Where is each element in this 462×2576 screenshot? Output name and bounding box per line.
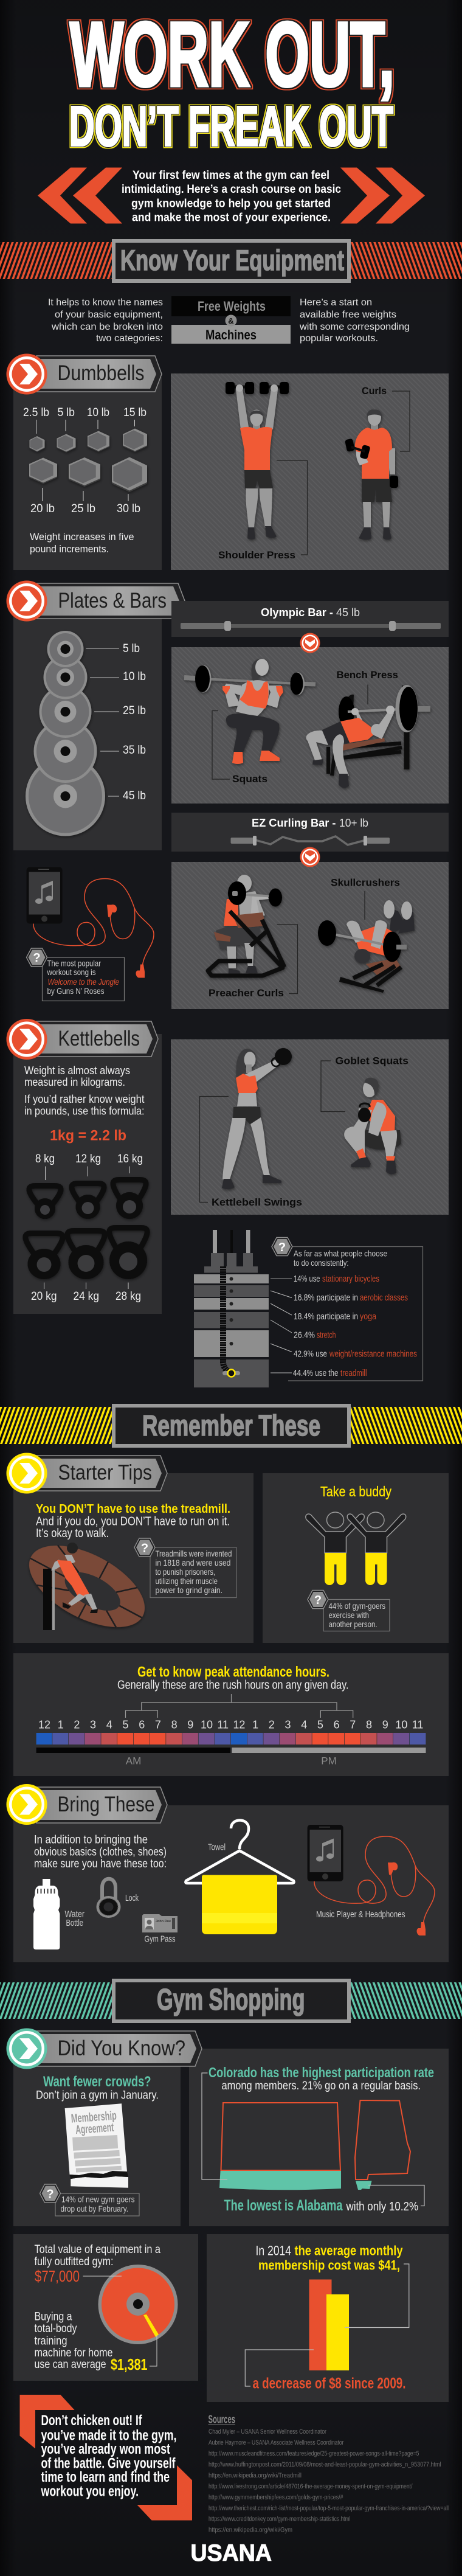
hour labels: 12 [38, 1719, 50, 1731]
panel: take a buddy [263, 1473, 449, 1643]
membership cost text: In 2014 [255, 2243, 291, 2258]
sources: Aubrie Haymore – USANA Associate Wellness Coordinator [209, 2439, 344, 2446]
callout: don't chicken out [19, 2395, 192, 2521]
hour labels: 7 [350, 1719, 356, 1731]
ribbon: Plates and Bars [6, 580, 185, 622]
plate labels: 5 lb [123, 642, 140, 655]
icon: chevron badge [300, 847, 320, 867]
formula: 1kg = 2.2 lb [50, 1128, 126, 1144]
hour labels: 4 [106, 1719, 112, 1731]
dumbbell weight labels: 25 lb [71, 502, 95, 515]
equipment intro right text: popular workouts. [300, 333, 378, 344]
sources: Chad Myler – USANA Senior Wellness Coordinator [209, 2428, 326, 2435]
sources: http://www.livestrong.com/article/487016-the-average-money-spent-on-gym-equipment/ [209, 2483, 413, 2490]
callout: workout song: The most popular [47, 959, 101, 968]
kettlebell labels [31, 1153, 143, 1303]
callout: gym-goers [308, 1590, 390, 1631]
stats list: aerobic classes [360, 1293, 408, 1303]
icon: torn membership agreement [65, 2103, 128, 2188]
hour labels [38, 1719, 423, 1731]
labels: barbell exercises: Bench Press [337, 669, 398, 681]
equipment value text: machine for home [34, 2347, 113, 2359]
equipment value text [34, 2243, 160, 2371]
kettlebell labels: 8 kg [35, 1153, 55, 1165]
hour labels: 1 [58, 1719, 64, 1731]
panel: fewer crowds [13, 2049, 181, 2226]
icon: torn membership agreement: Membership [71, 2109, 117, 2126]
callout: treadmill history: to punish prisoners, [156, 1567, 215, 1577]
callout: new gym goers: drop out by February. [61, 2204, 128, 2213]
panel: EZ bar exercises [171, 862, 449, 1009]
ribbon: Kettlebells [6, 1019, 158, 1060]
plate labels [86, 642, 146, 802]
stats list: weight/resistance machines [329, 1349, 417, 1359]
peak attendance heading [117, 1664, 349, 1692]
hour labels: 9 [382, 1719, 388, 1731]
panel: participation by state [189, 2049, 449, 2226]
categories: free weights and machines [171, 296, 291, 344]
hour labels: 3 [284, 1719, 291, 1731]
equipment value text: Buying a [34, 2310, 72, 2324]
callout: treadmill history: Treadmills were invented [156, 1549, 232, 1558]
sources: https://www.creditdonkey.com/gym-membership-statistics.html [209, 2516, 350, 2523]
callout: workout song: ? [33, 951, 41, 965]
equipment intro right text: available free weights [300, 310, 396, 320]
icon: two buddies [306, 1512, 406, 1585]
icon: gym pass: John Doe [156, 1920, 171, 1923]
panel: olympic bar: 45 lb [336, 606, 360, 619]
stats list: 18.4% participate in [294, 1311, 358, 1322]
treadmill tip text: You DON’T have to use the treadmill. [36, 1502, 230, 1516]
ribbon: Did You Know: Did You Know? [57, 2036, 185, 2060]
icon: water bottle [33, 1879, 84, 1949]
fewer crowds text: Don’t join a gym in January. [36, 2089, 159, 2102]
hour labels: 5 [317, 1719, 323, 1731]
stats list: 44.4% use the [293, 1368, 338, 1378]
panel: olympic bar: Olympic Bar - [261, 606, 333, 619]
dumbbell weight labels: 10 lb [87, 406, 109, 419]
hour labels: 11 [412, 1719, 423, 1731]
labels: EZ bar exercises: Skullcrushers [331, 877, 400, 888]
callout: what people do consistently: As far as what people choose [294, 1248, 387, 1258]
panel: barbell exercises [171, 647, 449, 804]
callout: treadmill history: in 1818 and were used [156, 1558, 231, 1567]
equipment intro right text [299, 297, 410, 344]
fewer crowds text: Want fewer crowds? [43, 2074, 151, 2090]
callout: gym-goers: ? [314, 1594, 322, 1607]
hour labels: 1 [252, 1719, 258, 1731]
hour labels: 2 [74, 1719, 80, 1731]
icon: gym pass: Gym Pass [145, 1934, 175, 1944]
figure: preacher curls [208, 875, 284, 976]
sources: https://en.wikipedia.org/wiki/Treadmill [209, 2472, 302, 2479]
hour labels: 6 [139, 1719, 145, 1731]
peak attendance heading: Generally these are the rush hours on any given day. [117, 1679, 349, 1692]
section banner: Remember These [0, 1406, 462, 1446]
dumbbell weight labels: 2.5 lb [23, 406, 49, 419]
stats list [293, 1274, 417, 1378]
ribbon: Did You Know [6, 2028, 202, 2069]
kettlebell text: Weight is almost always [24, 1064, 130, 1077]
labels: EZ bar exercises: Preacher Curls [209, 987, 284, 999]
panel: kettlebell sizes [13, 1034, 162, 1314]
callout: don't chicken out: Don’t chicken out! If [41, 2412, 142, 2429]
hour labels: 6 [334, 1719, 340, 1731]
hour labels: 12 [233, 1719, 245, 1731]
figure: squats [184, 659, 315, 764]
hour labels: 9 [187, 1719, 193, 1731]
hour labels: 3 [90, 1719, 96, 1731]
section banner: Gym Shopping: Gym Shopping [157, 1984, 305, 2016]
membership cost text: the average monthly [294, 2243, 403, 2258]
intro with chevrons: intimidating. Here’s a crash course on basic [122, 183, 341, 196]
plate labels: 35 lb [123, 744, 146, 757]
hour labels: 10 [201, 1719, 213, 1731]
intro with chevrons [38, 168, 425, 224]
hour labels: 10 [395, 1719, 407, 1731]
equipment intro left text: which can be broken into [51, 322, 163, 332]
equipment value text: total-body [34, 2322, 77, 2335]
panel: kettlebell exercises [171, 1039, 449, 1215]
kettlebell text: in pounds, use this formula: [24, 1105, 145, 1117]
equipment value text: Total value of equipment in a [34, 2243, 160, 2256]
equipment value text: training [34, 2335, 67, 2348]
hour labels: 8 [366, 1719, 372, 1731]
equipment value text: use can average [34, 2358, 106, 2371]
figure: kettlebell swing [222, 1048, 292, 1189]
hour labels: 4 [301, 1719, 307, 1731]
stats list: 26.4% [294, 1330, 315, 1341]
icon: towel on hanger: Towel [208, 1842, 226, 1853]
equipment intro left text: It helps to know the names [48, 297, 163, 308]
hour labels: 8 [171, 1719, 178, 1731]
icon: treadwheel with runner [16, 1529, 157, 1644]
panel: EZ curling bar: 10+ lb [339, 817, 368, 829]
sources: http://www.gymmembershipfees.com/golds-gym-prices/# [209, 2494, 343, 2501]
equipment intro left text: of your basic equipment, [55, 310, 163, 320]
membership cost text [255, 2243, 403, 2272]
callout: gym-goers: another person. [328, 1619, 377, 1629]
treadmill tip text: It’s okay to walk. [36, 1527, 109, 1540]
hour labels: 11 [217, 1719, 229, 1731]
section banner: Know Your Equipment: Know Your Equipment [120, 244, 344, 276]
callout: treadmill history: ? [141, 1541, 148, 1555]
lowest rate text: The lowest is Alabama [224, 2197, 343, 2214]
kettlebell labels: 28 kg [116, 1290, 141, 1303]
kettlebell text: If you’d rather know weight [24, 1093, 145, 1105]
panel: dumbbell sizes [13, 377, 162, 570]
ribbon: Dumbbells: Dumbbells [57, 361, 145, 385]
membership cost text: membership cost was $41, [258, 2258, 400, 2272]
figure: bench press [306, 685, 430, 788]
dumbbell weight labels: 30 lb [117, 502, 140, 515]
categories: free weights and machines: Free Weights [198, 299, 266, 314]
stats list: stationary bicycles [322, 1274, 379, 1284]
icon: kettlebells [26, 1180, 147, 1279]
peak attendance heading: Get to know peak attendance hours. [137, 1664, 329, 1680]
ribbon: Dumbbells [6, 354, 162, 394]
intro with chevrons: gym knowledge to help you get started [131, 197, 331, 210]
kettlebell labels: 24 kg [73, 1290, 99, 1303]
icon: torn membership agreement: Agreement [75, 2121, 114, 2137]
callout: new gym goers: 14% of new gym goers [61, 2195, 135, 2204]
plate labels: 45 lb [123, 790, 146, 802]
chart: plate pie [98, 2265, 178, 2344]
icon: chevron badge [300, 633, 320, 653]
dumbbell note: pound increments. [30, 543, 109, 555]
figure: curls [345, 409, 398, 540]
callout: new gym goers: ? [46, 2187, 54, 2201]
panel: olympic bar [171, 601, 449, 637]
callout: don't chicken out: you’ve already won most [41, 2441, 170, 2457]
equipment intro left text: two categories: [96, 333, 163, 344]
decrease text: a decrease of $8 since 2009. [253, 2375, 406, 2392]
labels: exercises [218, 385, 410, 561]
labels: exercises: Shoulder Press [218, 549, 295, 561]
kettlebell labels: 16 kg [117, 1153, 143, 1165]
panel: EZ curling bar [171, 813, 449, 852]
icon: weight stack [194, 1230, 269, 1387]
chart: cost bars [309, 2280, 349, 2370]
treadmill tip text: And if you do, you DON’T have to run on it. [36, 1515, 230, 1528]
sources [208, 2414, 449, 2534]
labels: barbell exercises: Squats [232, 773, 267, 785]
leader lines [202, 2073, 424, 2206]
labels: EZ bar exercises [209, 877, 400, 999]
icon: water bottle: Bottle [66, 1918, 83, 1928]
value labels: $1,381 [111, 2355, 147, 2373]
participation heading: among members. 21% go on a regular basis. [221, 2080, 421, 2092]
hour labels: 7 [155, 1719, 161, 1731]
callout: what people do consistently: ? [278, 1241, 286, 1254]
hour labels: 2 [269, 1719, 275, 1731]
icon: water bottle: Water [64, 1909, 84, 1920]
figure: shoulder press [226, 382, 289, 540]
categories: free weights and machines: Machines [205, 327, 257, 342]
labels: kettlebell exercises [199, 1055, 409, 1208]
kettlebell text: measured in kilograms. [24, 1076, 125, 1088]
equipment intro left text [48, 297, 163, 344]
section banner: Remember These: Remember These [142, 1410, 320, 1442]
panel: membership cost [207, 2234, 449, 2402]
figure: skullcrushers [318, 900, 415, 993]
dumbbell weight labels: 20 lb [30, 502, 55, 515]
panel: bring these [13, 1805, 449, 1962]
lowest rate text: with only 10.2% [346, 2200, 418, 2213]
callout: workout song: by Guns N’ Roses [47, 986, 105, 996]
panel: weight plates [13, 593, 162, 850]
kettlebell labels: 20 kg [31, 1290, 57, 1303]
callout: what people do consistently [271, 1237, 423, 1381]
stats list: 16.8% participate in [294, 1293, 358, 1303]
sources: Sources [208, 2414, 235, 2426]
callout: treadmill history: utilizing their muscle [156, 1576, 218, 1586]
icon: plate stack [26, 631, 105, 836]
value labels [35, 2267, 157, 2373]
plate labels: 10 lb [123, 670, 146, 683]
intro with chevrons: Your first few times at the gym can feel [133, 169, 329, 182]
fewer crowds text [36, 2074, 159, 2102]
bracket [125, 1694, 353, 1718]
AM PM bars: PM [321, 1755, 337, 1766]
bring these intro: make sure you have these too: [34, 1858, 167, 1870]
panel: dumbbell exercises [171, 373, 449, 570]
dumbbell note: Weight increases in five [30, 531, 134, 543]
ribbon: Kettlebells: Kettlebells [58, 1027, 140, 1050]
chart: Colorado outline [219, 2103, 341, 2190]
stats list: 14% use [294, 1274, 320, 1284]
participation heading [209, 2064, 434, 2092]
treadmill tip text [36, 1502, 230, 1540]
icon: lock: Lock [125, 1893, 139, 1903]
callout: gym-goers: exercise with [328, 1610, 369, 1620]
callout: new gym goers [40, 2184, 139, 2216]
callout: what people do consistently: to do consistently: [294, 1258, 349, 1268]
panel: take a buddy: Take a buddy [320, 1484, 391, 1499]
callout: treadmill history: power to grind grain. [156, 1585, 222, 1595]
labels: exercises: Curls [362, 385, 387, 397]
callout: don't chicken out: of the battle. Give yourself [41, 2455, 176, 2472]
callout: gym-goers: 44% of gym-goers [328, 1601, 385, 1611]
ribbon: Plates and Bars: Plates & Bars [58, 589, 167, 613]
dumbbell note [30, 531, 134, 555]
stats list: treadmill [340, 1368, 367, 1378]
labels: kettlebell exercises: Goblet Squats [336, 1055, 409, 1067]
callout: don't chicken out: you’ve made it to the gym, [41, 2427, 176, 2444]
callout: don't chicken out: time to learn and find the [41, 2469, 170, 2485]
dumbbell weight labels: 15 lb [123, 406, 147, 419]
title [69, 3, 395, 158]
bring these intro: obvious basics (clothes, shoes) [34, 1845, 167, 1859]
value labels: $77,000 [35, 2267, 80, 2285]
dumbbell weight labels: 5 lb [57, 406, 75, 419]
figure: goblet squat [344, 1078, 401, 1175]
panel: EZ curling bar: EZ Curling Bar - [252, 817, 336, 829]
bring these intro [34, 1833, 167, 1870]
intro with chevrons: and make the most of your experience. [132, 212, 331, 224]
plate labels: 25 lb [123, 704, 146, 717]
section banner: Gym Shopping [0, 1981, 462, 2021]
leader lines [245, 2264, 409, 2386]
ribbon: Bring These [6, 1784, 167, 1825]
equipment value text: fully outfitted gym: [34, 2255, 113, 2268]
chart: Alabama outline [355, 2100, 410, 2190]
icon: music player and headphones: Music Player & Headphones [316, 1909, 405, 1920]
icon: gym pass [142, 1914, 178, 1944]
categories: free weights and machines: & [228, 316, 234, 325]
panel: equipment value [13, 2234, 198, 2381]
hour heat strip [36, 1733, 426, 1745]
labels: barbell exercises [212, 669, 398, 785]
icon: music player and headphones [27, 867, 154, 978]
equipment intro right text: Here’s a start on [300, 297, 372, 308]
callout: workout song: workout song is [47, 967, 96, 977]
hour labels: 5 [122, 1719, 129, 1731]
callout: workout song: Welcome to the Jungle [47, 977, 119, 987]
ribbon: Bring These: Bring These [57, 1793, 154, 1816]
AM PM bars [36, 1748, 426, 1766]
ribbon: Starter Tips: Starter Tips [58, 1461, 152, 1484]
panel: starter tips treadmill [13, 1473, 253, 1644]
stats list: yoga [360, 1311, 377, 1322]
bring these intro: In addition to bringing the [34, 1833, 148, 1847]
icon: towel on hanger [185, 1820, 294, 1934]
section banner: Know Your Equipment [0, 241, 462, 281]
sources: https://en.wikipedia.org/wiki/Gym [209, 2527, 292, 2534]
icon: lock [96, 1879, 139, 1918]
stats list: stretch [317, 1330, 336, 1341]
logo: USANA: USANA [191, 2540, 272, 2566]
panel: peak attendance hours [13, 1653, 449, 1776]
labels: kettlebell exercises: Kettlebell Swings [212, 1196, 302, 1208]
dumbbell weight labels [23, 406, 147, 515]
AM PM bars: AM [126, 1755, 141, 1766]
stats list: 42.9% use [294, 1349, 327, 1359]
callout: don't chicken out: workout you enjoy. [41, 2483, 139, 2500]
equipment intro right text: with some corresponding [299, 322, 410, 332]
callout: treadmill history [134, 1538, 236, 1597]
callout: workout song [27, 948, 124, 1001]
ribbon: Starter Tips [6, 1453, 167, 1494]
kettlebell text [24, 1064, 145, 1117]
kettlebell labels: 12 kg [75, 1153, 101, 1165]
icon: music player and headphones [308, 1825, 435, 1935]
icon: hex dumbbell ends [29, 428, 147, 492]
